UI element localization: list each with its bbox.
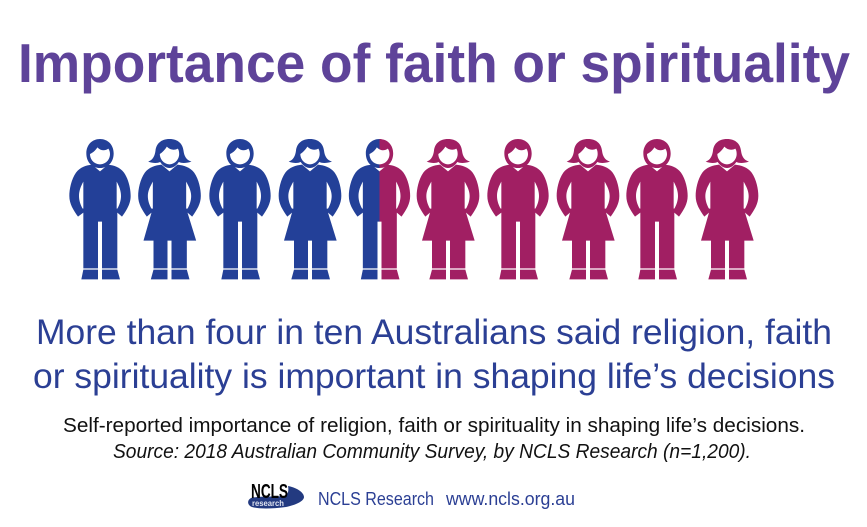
description and source: Self-reported importance of religion, faith or spirituality in shaping life’s decisions. xyxy=(63,415,805,437)
icon: man 3 blue xyxy=(209,139,271,279)
icon: woman 6 magenta xyxy=(417,139,479,279)
footer: organisation name and website: NCLS Research xyxy=(318,489,434,509)
headline statement: or spirituality is important in shaping life’s decisions xyxy=(33,357,835,396)
icon: woman 4 blue xyxy=(279,139,341,279)
footer: organisation name and website xyxy=(318,489,575,509)
headline statement: More than four in ten Australians said religion, faith xyxy=(36,313,832,352)
icon: man 1 blue xyxy=(69,139,131,279)
icon: man 9 magenta xyxy=(626,139,688,279)
icon: woman 2 blue xyxy=(138,139,201,279)
headline statement xyxy=(33,313,835,396)
footer: organisation name and website: www.ncls.org.au xyxy=(445,489,575,509)
logo: NCLS research: NCLS xyxy=(251,481,288,503)
pictogram: ten people xyxy=(69,139,758,279)
description and source xyxy=(63,415,805,463)
icon: woman 8 magenta xyxy=(557,139,619,279)
title: Importance of faith or spirituality xyxy=(18,32,850,94)
icon: woman 10 magenta xyxy=(696,139,758,279)
icon: man 7 magenta xyxy=(487,139,549,279)
description and source: Source: 2018 Australian Community Survey, by NCLS Research (n=1,200). xyxy=(113,441,751,463)
logo: NCLS research: research xyxy=(252,499,284,508)
icon: man 5 half blue half magenta xyxy=(349,139,410,279)
